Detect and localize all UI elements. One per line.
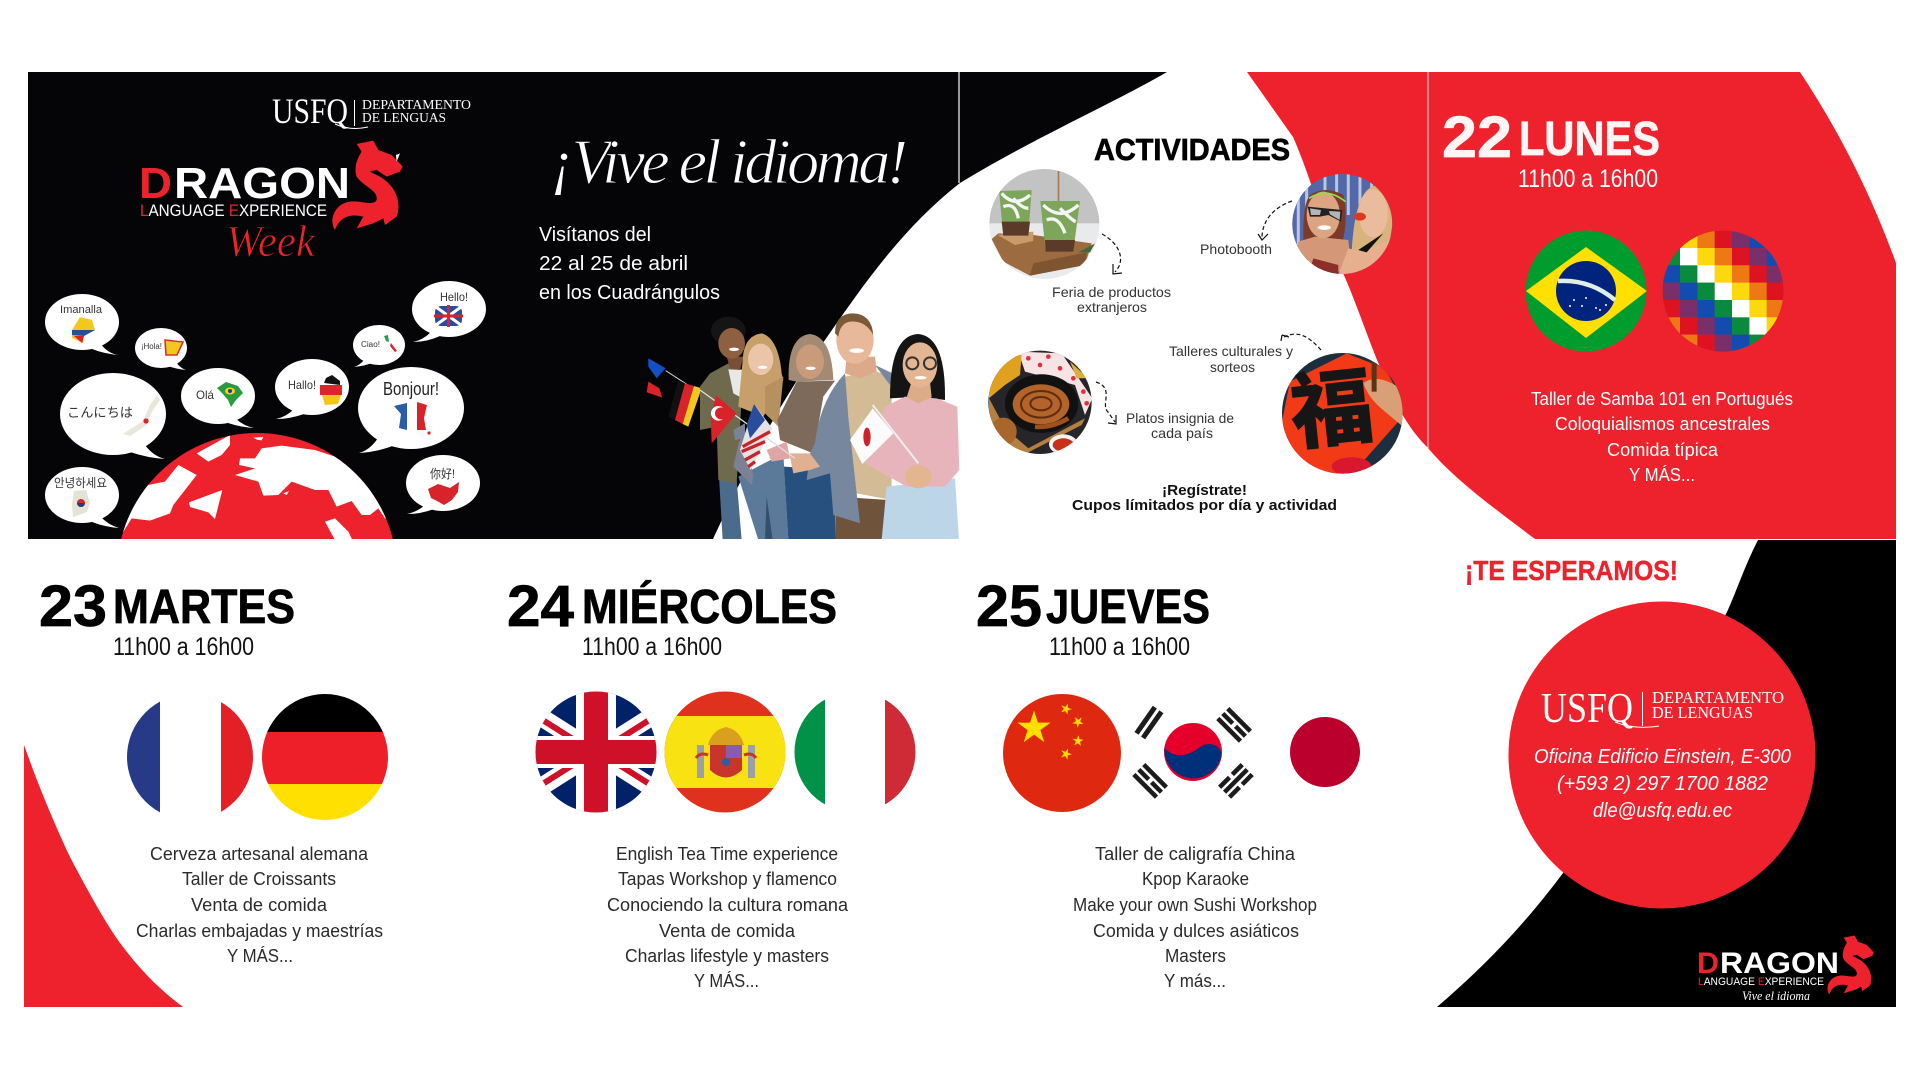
photo: feria drinks (989, 169, 1100, 279)
label with arrow: platos: cada país (1151, 425, 1213, 441)
text block: visit details: Visítanos del (539, 224, 651, 246)
flag: Japan (1290, 717, 1360, 787)
activity list: Monday: Y MÁS... (1629, 465, 1695, 485)
callout: register: Cupos límitados por día y actividad (1072, 497, 1337, 514)
activity list: Thursday: Masters (1165, 946, 1226, 966)
flag: Spain (664, 691, 786, 813)
Dragons logo: D (139, 159, 172, 208)
speech bubble: Ola (181, 368, 255, 428)
Dragons logo bottom: Vive el idioma (1742, 988, 1810, 1003)
activity list: Monday: Taller de Samba 101 en Portugués (1531, 389, 1793, 409)
Dragons logo bottom: RAGON (1720, 947, 1839, 980)
time: Wednesday: 11h00 a 16h00 (582, 633, 722, 661)
speech bubble: Hello (412, 281, 486, 342)
speech bubble: Bonjour (358, 367, 464, 453)
label with arrow: feria (1052, 234, 1171, 315)
icon: red dragon S (332, 141, 403, 230)
icon: red dragon S small (1828, 935, 1874, 994)
panel: black hero background (28, 72, 1167, 539)
activity list: Tuesday: Y MÁS... (227, 946, 293, 966)
speech bubble: Ciao: Ciao! (361, 340, 380, 349)
USFQ logo top (272, 91, 471, 131)
day heading: 22 Lunes: LUNES (1519, 113, 1660, 166)
flag: Italy (794, 700, 916, 804)
Dragons logo (139, 141, 403, 230)
day heading: 22 Lunes (1442, 105, 1660, 170)
flag: France (127, 702, 253, 812)
label with arrow: talleres: Talleres culturales y (1169, 343, 1293, 359)
label with arrow: feria: Feria de productos (1052, 284, 1171, 300)
activity list: Tuesday: Cerveza artesanal alemana (150, 844, 369, 864)
activity list: Wednesday: Venta de comida (659, 921, 796, 941)
activity list: Wednesday (607, 844, 849, 991)
day heading: 23 Martes: MARTES (113, 581, 295, 634)
activity list: Monday: Comida típica (1607, 440, 1719, 460)
activity list: Wednesday: English Tea Time experience (616, 844, 838, 864)
speech bubble: Hello: Hello! (440, 290, 468, 304)
speech bubble: Korean greeting (45, 467, 119, 528)
day heading: 25 Jueves (976, 574, 1210, 639)
speech bubble: Hola (135, 328, 187, 370)
callout: register: ¡Regístrate! (1162, 482, 1247, 499)
text block: visit details: en los Cuadrángulos (539, 282, 720, 304)
activity list: Thursday: Taller de caligrafía China (1095, 844, 1296, 864)
text block: visit details: 22 al 25 de abril (539, 253, 688, 275)
activity list: Wednesday: Tapas Workshop y flamenco (618, 869, 837, 889)
activity list: Tuesday: Charlas embajadas y maestrías (136, 921, 383, 941)
speech bubble: Hola: ¡Hola! (141, 342, 162, 351)
speech bubble: Korean greeting: 안녕하세요 (54, 476, 107, 490)
day heading: 24 Miercoles: 24 (507, 574, 574, 639)
day heading: 24 Miercoles: MIÉRCOLES (582, 580, 837, 634)
arrow: dashed to photobooth label (1258, 201, 1292, 240)
speech bubble: Bonjour: Bonjour! (383, 379, 439, 399)
photo: photobooth friends (1292, 173, 1393, 275)
day heading: 24 Miercoles (507, 574, 837, 639)
flag: United Kingdom (530, 691, 662, 813)
label with arrow: photobooth: Photobooth (1200, 241, 1272, 257)
time: Monday: 11h00 a 16h00 (1518, 165, 1658, 193)
activity list: Monday (1531, 389, 1793, 485)
contact circle: (+593 2) 297 1700 1882 (1557, 773, 1768, 795)
callout: register (1072, 482, 1337, 514)
day heading: 22 Lunes: 22 (1442, 105, 1512, 170)
photo: Chinese calligraphy (1282, 353, 1403, 474)
arrow: dashed to platos label (1096, 382, 1116, 424)
label with arrow: talleres: sorteos (1210, 359, 1255, 375)
time: Tuesday: 11h00 a 16h00 (113, 633, 254, 661)
flag: Wiphala (1663, 231, 1784, 352)
speech bubble: Chinese greeting: 你好! (430, 467, 455, 481)
activity list: Tuesday: Venta de comida (191, 895, 328, 915)
panel: red corner bottom left (24, 745, 183, 1007)
photo: group of students with flags (700, 313, 959, 540)
speech bubble: Japanese greeting (60, 373, 166, 459)
activity list: Thursday: Kpop Karaoke (1142, 869, 1249, 889)
activity list: Thursday: Make your own Sushi Workshop (1073, 895, 1317, 915)
heading: ACTIVIDADES: ACTIVIDADES (1094, 132, 1290, 167)
activity list: Wednesday: Charlas lifestyle y masters (625, 946, 829, 966)
activity list: Thursday: Y más... (1164, 971, 1226, 991)
speech bubble: Imanalla (45, 294, 119, 355)
photo: Chinese calligraphy: 福 (1283, 338, 1379, 467)
speech bubble: Imanalla: Imanalla (60, 304, 103, 316)
heading: Te esperamos: ¡TE ESPERAMOS! (1465, 555, 1678, 586)
label with arrow: photobooth (1200, 201, 1292, 257)
day heading: 25 Jueves: JUEVES (1046, 581, 1210, 634)
speech bubble: Hallo (275, 359, 349, 419)
speech bubble: Hallo: Hallo! (288, 378, 316, 392)
USFQ logo in circle: DEPARTAMENTO (1652, 688, 1784, 707)
label with arrow: feria: extranjeros (1077, 299, 1147, 315)
contact circle: dle@usfq.edu.ec (1593, 800, 1732, 822)
USFQ logo top: USFQ (272, 91, 348, 131)
time: Thursday: 11h00 a 16h00 (1049, 633, 1190, 661)
day heading: 23 Martes (39, 574, 295, 639)
label with arrow: platos: Platos insignia de (1126, 410, 1234, 426)
USFQ logo in circle (1541, 686, 1784, 732)
activity list: Tuesday (136, 844, 383, 966)
activity list: Monday: Coloquialismos ancestrales (1555, 414, 1770, 434)
speech bubble: Ciao (353, 325, 405, 367)
label with arrow: talleres (1169, 334, 1321, 375)
contact circle: Oficina Edificio Einstein, E-300 (1534, 746, 1791, 768)
activity list: Thursday: Comida y dulces asiáticos (1093, 921, 1299, 941)
activity list: Thursday (1073, 844, 1317, 991)
Dragons logo bottom (1697, 935, 1874, 1003)
speech bubble: Chinese greeting (406, 455, 480, 514)
activity list: Wednesday: Conociendo la cultura romana (607, 895, 849, 915)
photo: sausage dish (987, 348, 1095, 457)
USFQ logo top: DE LENGUAS (362, 111, 446, 126)
flag: Germany (262, 694, 388, 820)
day heading: 25 Jueves: 25 (976, 574, 1042, 639)
activity list: Tuesday: Taller de Croissants (182, 869, 336, 889)
USFQ logo top: DEPARTAMENTO (362, 98, 471, 113)
flag: China (1003, 694, 1121, 812)
text block: visit details (539, 224, 720, 304)
panel: black corner bottom right (1437, 540, 1896, 1007)
title: Vive el idioma: ¡Vive el idioma! (550, 126, 908, 197)
USFQ logo in circle: DE LENGUAS (1652, 703, 1753, 722)
contact circle (1508, 602, 1816, 908)
globe (121, 433, 393, 539)
flags: France and Germany fragments (647, 358, 703, 427)
day heading: 23 Martes: 23 (39, 574, 107, 639)
arrow: dashed to feria label (1102, 234, 1122, 274)
activity list: Wednesday: Y MÁS... (694, 971, 759, 991)
flag: Brazil (1526, 230, 1646, 352)
Dragons logo bottom: LANGUAGE EXPERIENCE (1698, 976, 1824, 988)
Dragons logo: RAGON (174, 159, 350, 208)
flag: South Korea (1132, 706, 1254, 799)
label with arrow: platos (1096, 382, 1234, 441)
Dragons logo: LANGUAGE EXPERIENCE (140, 202, 327, 220)
Dragons logo bottom: D (1697, 947, 1719, 980)
speech bubble: Ola: Olá (196, 388, 214, 402)
panel: red Monday background (1247, 72, 1896, 539)
USFQ logo in circle: USFQ (1541, 686, 1633, 732)
speech bubble: Japanese greeting: こんにちは (67, 405, 133, 420)
arrow: dashed to talleres label (1281, 334, 1321, 350)
Week script: Week (226, 217, 316, 266)
